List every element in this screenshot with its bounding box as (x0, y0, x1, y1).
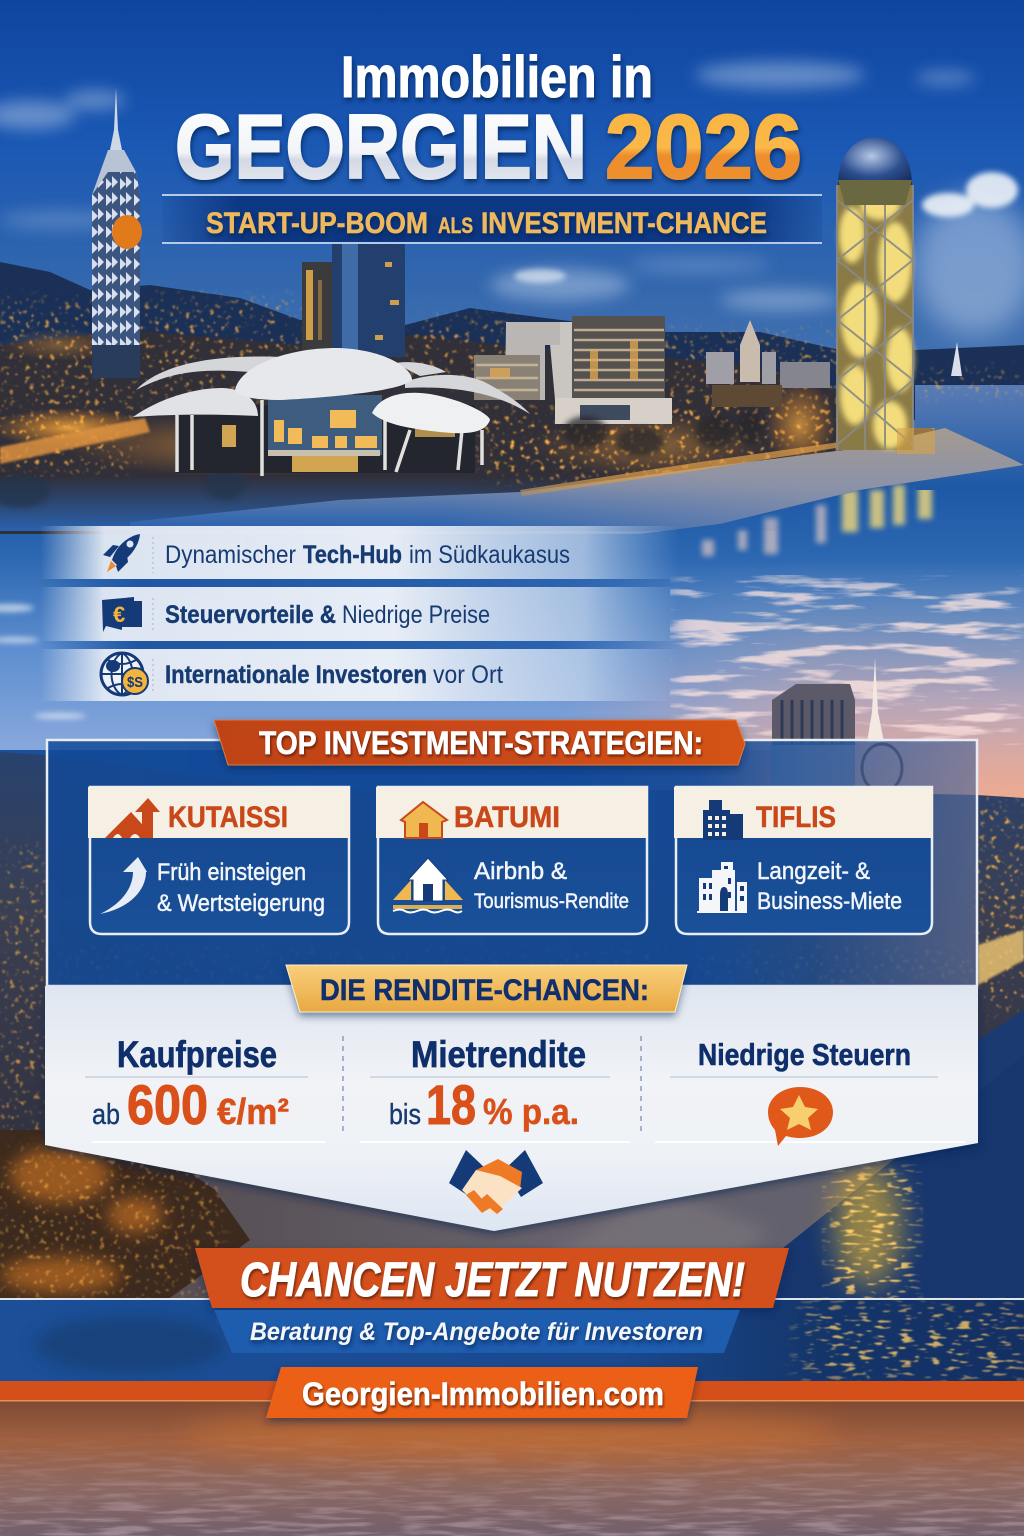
column: rental yield: 18 (426, 1073, 476, 1136)
text: tech hub: Dynamischer (165, 541, 296, 569)
Alphabet tower (837, 137, 935, 454)
website ribbon: Georgien-Immobilien.com (302, 1376, 664, 1412)
title line: Georgien: GEORGIEN (175, 97, 587, 198)
heading: Tiflis: TIFLIS (756, 801, 836, 834)
text: Tiflis strategy (757, 858, 902, 915)
column: rental yield: Mietrendite (411, 1034, 586, 1075)
left skyscraper with orange sphere (92, 88, 142, 378)
background: lower blue band (0, 1298, 1024, 1381)
card: Batumi (376, 787, 648, 934)
column: purchase prices: Kaufpreise (117, 1034, 277, 1075)
icon: euro flag (102, 597, 142, 632)
background: lower coastal city (0, 752, 1024, 1160)
text: tax advantages (165, 601, 490, 629)
subtitle text: ALS (438, 213, 473, 238)
column: purchase prices: ab (92, 1099, 120, 1131)
text: Batumi strategy (474, 858, 629, 913)
panel: investment strategies (47, 720, 977, 986)
background: sunset high-rise and spire (772, 658, 884, 745)
benefits list (40, 526, 680, 701)
subtitle text: START-UP-BOOM (206, 207, 428, 240)
text: Tiflis strategy: Langzeit- & (757, 858, 870, 885)
benefit row: international investors (40, 649, 680, 701)
background: sky (0, 0, 1024, 480)
heading: Batumi: BATUMI (454, 801, 560, 834)
text: international investors: Internationale Investoren (165, 661, 427, 689)
text: Batumi strategy: Airbnb & (474, 858, 567, 885)
title line: Immobilien in: Immobilien in (341, 45, 653, 110)
text: tech hub: im Südkaukasus (409, 541, 570, 569)
icon: rising arrow (100, 857, 147, 914)
icon: handshake (449, 1150, 543, 1214)
foreground trees (0, 410, 762, 508)
central glass towers (302, 232, 405, 357)
card: Kutaissi (88, 787, 350, 934)
subtitle banner (162, 194, 822, 244)
right hotel buildings (474, 316, 962, 424)
heading ribbon: die rendite-chancen: DIE RENDITE-CHANCEN: (320, 974, 649, 1007)
sub-ribbon: consultation: Beratung & Top-Angebote für Investoren (250, 1318, 703, 1346)
column: purchase prices: €/m² (217, 1091, 289, 1132)
icon: globe with coin: $S (127, 674, 143, 691)
icon: orange house with arrow (105, 798, 160, 838)
text: tax advantages: Niedrige Preise (342, 601, 490, 629)
text: tech hub: Tech-Hub (303, 541, 402, 569)
text: Kutaissi strategy: Früh einsteigen (157, 859, 306, 886)
heading ribbon: die rendite-chancen (286, 965, 687, 1012)
text: Kutaissi strategy (157, 859, 325, 917)
icon: white office buildings (697, 862, 747, 913)
background: copper sunset water (0, 1400, 1024, 1536)
text: Kutaissi strategy: & Wertsteigerung (157, 890, 325, 917)
icon: rocket (103, 534, 140, 572)
icon: yellow house (401, 802, 447, 838)
heading ribbon: top investment strategies: TOP INVESTMENT-STRATEGIEN: (259, 725, 703, 761)
background: sea and sunset sky (0, 470, 1024, 810)
column: rental yield (389, 1034, 586, 1136)
benefit row: tax advantages (40, 587, 680, 641)
icon: euro flag: € (113, 602, 125, 627)
column: purchase prices (92, 1034, 289, 1136)
icon: navy high-rise (703, 800, 743, 840)
website band (0, 1367, 1024, 1418)
benefit row: tech hub (40, 526, 680, 579)
subtitle text (206, 207, 767, 240)
text: international investors: vor Ort (433, 661, 503, 689)
column: low taxes: Niedrige Steuern (698, 1037, 911, 1072)
panel: yield opportunities (45, 965, 978, 1231)
shell-roof convention building (133, 348, 530, 476)
subtitle text: INVESTMENT-CHANCE (481, 207, 767, 240)
column: low taxes (698, 1037, 911, 1146)
icon: beach house on water (393, 858, 463, 912)
column: rental yield: % p.a. (483, 1091, 579, 1132)
text: Tiflis strategy: Business-Miete (757, 888, 902, 915)
background: mountains and city ground (0, 262, 1024, 534)
title year: 2026: 2026 (605, 97, 802, 198)
icon: globe with coin (101, 653, 148, 695)
column: purchase prices: 600 (127, 1073, 208, 1136)
text: Batumi strategy: Tourismus-Rendite (474, 890, 629, 913)
text: tax advantages: Steuervorteile & (165, 601, 336, 629)
column: rental yield: bis (389, 1099, 421, 1131)
card: Tiflis (674, 787, 933, 934)
call to action ribbon: CHANCEN JETZT NUTZEN! (240, 1254, 745, 1307)
sub-ribbon: consultation (214, 1310, 740, 1353)
background: beach, trees and night water (0, 1055, 1024, 1305)
text: tech hub (165, 541, 570, 569)
title block (175, 45, 802, 198)
website ribbon (266, 1367, 698, 1418)
icon: star speech bubble (768, 1087, 833, 1146)
heading: Kutaissi: KUTAISSI (168, 801, 288, 834)
